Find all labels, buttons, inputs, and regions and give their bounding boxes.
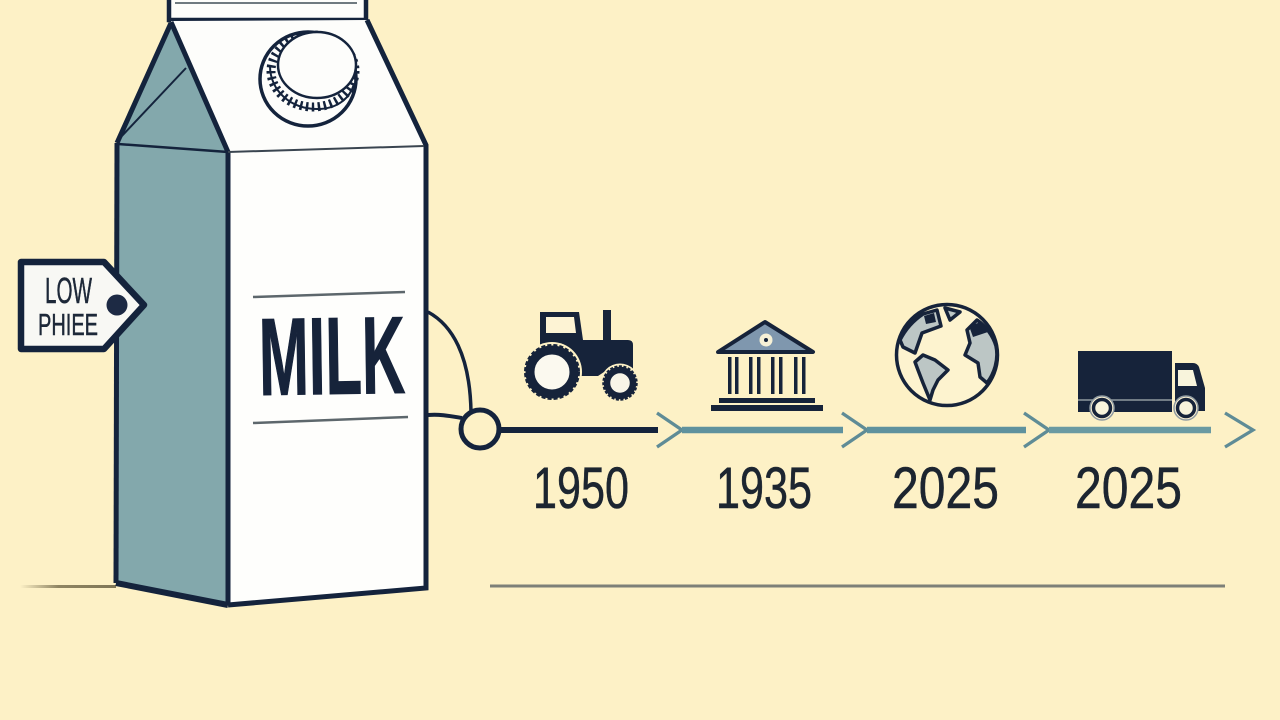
segment 1	[500, 427, 658, 433]
baseline rule	[490, 584, 1225, 588]
connector from carton to timeline	[428, 312, 499, 448]
tag text: LOW	[45, 270, 92, 311]
segment 4	[1049, 427, 1211, 433]
carton front panel	[171, 20, 426, 605]
year 1950: 1950	[533, 456, 629, 521]
carton left side panel	[116, 23, 228, 605]
tag text: PHIEE	[38, 307, 98, 342]
carton gable front	[171, 20, 426, 152]
arrow 1	[657, 413, 682, 447]
milk label: MILK	[258, 294, 406, 419]
milk carton	[116, 0, 426, 605]
year 2025 second: 2025	[1075, 456, 1182, 521]
icon: globe	[896, 304, 998, 406]
arrow 3	[1024, 413, 1049, 447]
year 1935: 1935	[716, 456, 812, 521]
label rule bottom	[253, 417, 408, 423]
year 2025: 2025	[892, 456, 999, 521]
icon: tractor	[522, 310, 640, 402]
arrow 2	[842, 413, 867, 447]
ground line left	[20, 585, 116, 588]
arrow 4	[1225, 413, 1253, 447]
carton top flap	[169, 0, 366, 20]
price tag	[21, 262, 144, 349]
segment 2	[682, 427, 843, 433]
year labels	[533, 456, 1182, 521]
icon: classical building	[711, 322, 823, 411]
icon: delivery truck	[1078, 351, 1205, 420]
label rule top	[253, 292, 405, 297]
timeline	[500, 413, 1253, 447]
tag text	[38, 270, 98, 342]
segment 3	[867, 427, 1026, 433]
bottle cap	[260, 32, 356, 126]
